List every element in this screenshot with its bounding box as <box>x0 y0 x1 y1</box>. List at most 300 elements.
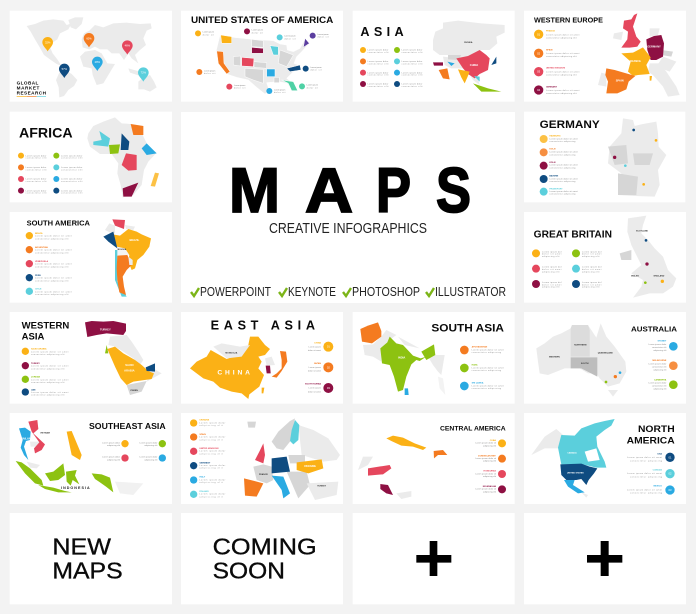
legend: 01 <box>669 455 672 459</box>
legend bubbles: Lorem ipsum <box>203 31 214 34</box>
panel: germany <box>524 112 685 202</box>
legend: Lorem ipsum dolor sit amet <box>31 378 69 381</box>
legend bubbles: dolor sit <box>274 91 286 94</box>
legend: UNITED KINGDOM <box>546 68 565 70</box>
heading: maps <box>229 156 471 226</box>
map: east asia <box>190 337 287 399</box>
legend <box>648 341 678 390</box>
legend: consectetur adipiscing elit <box>31 381 65 384</box>
legend: UKRAINE <box>199 419 210 422</box>
legend bubbles: Lorem ipsum <box>307 84 318 87</box>
legend: UNITED KINGDOM <box>199 448 219 450</box>
legend: SRI LANKA <box>472 381 484 384</box>
map: south america: BOLIVIA <box>118 248 127 251</box>
heading: coming soon: SOON <box>213 557 285 583</box>
legend: 01 <box>327 345 330 349</box>
legend: Lorem ipsum <box>309 345 321 348</box>
legend bubbles: Lorem ipsum <box>204 69 216 72</box>
map: world <box>27 17 157 97</box>
legend bubbles: Lorem ipsum <box>317 33 329 36</box>
map: asia: RUSSIA <box>464 41 473 44</box>
legend: Lorem ipsum dolor sit <box>475 488 496 491</box>
legend: Lorem ipsum dolor <box>199 450 226 453</box>
legend <box>18 153 83 195</box>
legend: CANBERRA <box>654 378 667 381</box>
legend: Lorem ipsum dolor sit amet <box>549 190 578 193</box>
legend: adipiscing elit <box>653 368 667 371</box>
legend: Lorem ipsum dolor sit amet <box>35 249 72 252</box>
legend: consectetur adipiscing elit <box>546 36 577 39</box>
legend: TURKEY <box>31 363 40 365</box>
legend bubbles <box>195 28 329 94</box>
map: south america: BRAZIL <box>129 238 140 242</box>
panel: africa <box>10 112 172 202</box>
legend: Lorem ipsum dolor sit <box>475 472 496 475</box>
map: germany <box>608 118 666 197</box>
legend: consectetur elit <box>652 384 667 387</box>
legend: Lorem ipsum dolor sit amet <box>35 235 72 238</box>
heading: new maps <box>52 533 123 583</box>
legend: consectetur adipiscing <box>472 387 502 390</box>
title: global market research: RESEARCH <box>17 91 47 96</box>
map: western europe: SPAIN <box>616 78 624 82</box>
legend: consectetur adipiscing <box>630 492 663 495</box>
legend: Lorem ipsum dolor sit amet <box>627 456 662 459</box>
map: south asia: INDIA <box>398 356 405 360</box>
map pins: 28% <box>95 60 101 64</box>
heading: maps: M <box>229 156 280 226</box>
legend: consectetur adipiscing <box>630 475 663 478</box>
legend bubbles: dolor sit <box>307 86 318 89</box>
map: southeast asia: INDONESIA <box>61 486 90 490</box>
map: south america <box>103 219 151 297</box>
legend: adipiscing elit <box>199 452 223 455</box>
legend: adipiscing elit <box>199 424 223 427</box>
software list with checkmarks: KEYNOTE <box>288 284 336 299</box>
legend: Lorem ipsum dolor sit <box>475 442 496 445</box>
legend: consectetur adipiscing elit <box>546 73 577 76</box>
legend: SAUDI ARABIA <box>31 348 47 351</box>
legend: FRANCE <box>546 30 556 33</box>
legend: Lorem ipsum dolor <box>102 441 120 444</box>
legend: consectetur elit <box>652 365 667 368</box>
map: australia: WESTERN <box>549 357 560 359</box>
legend: adipiscing elit <box>542 270 560 273</box>
legend: Lorem ipsum dolor sit amet <box>549 177 578 180</box>
legend bubbles: dolor sit <box>317 36 329 39</box>
legend: Lorem ipsum dolor sit amet <box>546 89 580 92</box>
panel: central america <box>353 413 515 504</box>
legend: HAMBURG <box>549 135 561 138</box>
legend: ITALY <box>199 476 206 479</box>
title: CENTRAL AMERICA <box>440 426 506 433</box>
legend: consectetur elit <box>402 51 423 54</box>
legend: Lorem ipsum dolor <box>26 154 47 157</box>
legend: Lorem ipsum dolor <box>199 493 226 496</box>
legend: Lorem ipsum dolor sit amet <box>627 472 662 475</box>
legend: adipiscing elit <box>199 481 223 484</box>
legend <box>627 453 675 495</box>
legend: adipiscing elit <box>107 458 120 461</box>
map: europe: UKRAINE <box>304 464 316 468</box>
title: GREAT BRITAIN <box>534 230 612 241</box>
legend: Lorem ipsum dolor <box>199 421 226 424</box>
panel: southeast asia <box>10 413 172 504</box>
title <box>22 320 70 342</box>
map: north america <box>531 419 615 498</box>
legend: MEXICO <box>653 486 662 488</box>
legend: Lorem ipsum dolor <box>402 49 423 52</box>
heading: new maps: MAPS <box>52 557 123 583</box>
map: western europe: FRANCE <box>630 59 641 63</box>
subtitle: CREATIVE INFOGRAPHICS <box>269 220 427 237</box>
legend: DOMINICAN REP. <box>478 454 496 457</box>
panel: asia <box>353 11 515 102</box>
legend: UAE <box>31 388 36 391</box>
legend: Lorem ipsum dolor sit amet <box>35 263 72 266</box>
legend: consectetur elit <box>61 180 83 183</box>
legend: Lorem ipsum dol <box>582 281 602 284</box>
panel: plus one <box>353 513 515 604</box>
title: AFRICA <box>19 125 73 141</box>
legend: BAYERN <box>549 175 559 178</box>
legend <box>360 47 423 88</box>
icon: plus <box>587 541 622 576</box>
software list with checkmarks: PHOTOSHOP <box>352 284 420 299</box>
legend: adipiscing elit <box>542 255 560 258</box>
panel: europe <box>181 413 343 504</box>
legend bubbles: Lorem ipsum <box>234 84 246 87</box>
legend: consectetur elit <box>61 157 83 160</box>
legend <box>305 341 333 393</box>
panel: east asia <box>181 312 343 404</box>
legend: dolor sit amet <box>308 370 321 373</box>
panel: south america <box>10 212 172 303</box>
legend: dolor sit amet <box>582 268 602 271</box>
legend bubbles: Lorem ipsum <box>252 29 263 32</box>
legend: SPAIN <box>546 48 553 51</box>
legend: Lorem ipsum dolor <box>61 166 83 169</box>
panel: western asia <box>10 312 172 404</box>
map: north america: CANADA <box>567 451 577 454</box>
map: great britain: ENGLAND <box>654 274 665 277</box>
legend: PERU <box>35 275 41 277</box>
legend: 02 <box>537 51 541 55</box>
legend: Lorem ipsum dol <box>542 266 562 269</box>
legend: VENEZUELA <box>35 260 49 263</box>
legend: consectetur adipiscing <box>472 369 502 372</box>
legend: consectetur adipiscing elit <box>546 55 577 58</box>
legend: Lorem ipsum dolor <box>26 189 47 192</box>
legend: 02 <box>669 472 672 476</box>
legend: consectetur adipiscing <box>549 193 576 196</box>
legend: Lorem ipsum dolor <box>199 478 226 481</box>
panel: plus two <box>524 513 686 604</box>
map: great britain <box>620 216 676 298</box>
legend: dolor sit amet <box>582 283 602 286</box>
title: AUSTRALIA <box>631 327 677 334</box>
legend bubbles: dolor sit <box>284 37 296 40</box>
legend: consectetur elit <box>368 85 389 88</box>
map: europe: FRANCE <box>259 473 268 476</box>
legend: adipiscing elit <box>144 458 158 461</box>
legend: AFGHANISTAN <box>472 345 488 348</box>
title: WESTERN <box>22 320 70 330</box>
legend: KÖLN <box>549 161 556 164</box>
legend bubbles: Lorem ipsum <box>274 88 286 91</box>
legend: 03 <box>537 70 541 74</box>
map: western asia: ARABIA <box>124 369 135 373</box>
legend: Lorem ipsum dolor <box>139 456 158 459</box>
map: southeast asia: THAILAND <box>19 436 33 440</box>
map pins: 32% <box>45 40 51 44</box>
legend: Lorem ipsum dolor sit amet <box>31 350 69 353</box>
heading: coming soon <box>213 533 317 583</box>
panel: new maps <box>10 513 172 604</box>
legend: CHINA <box>314 341 321 344</box>
legend: consectetur elit <box>26 192 47 195</box>
legend: dolor sit amet <box>308 390 321 393</box>
legend: Lorem ipsum dolor sit amet <box>549 164 578 167</box>
legend: Lorem ipsum dolor <box>368 71 389 74</box>
title: ASIA <box>22 332 45 342</box>
legend <box>190 419 226 498</box>
legend: Lorem ipsum dolor sit amet <box>546 52 580 55</box>
map: great britain: WALES <box>631 274 639 277</box>
legend: consectetur adipiscing elit <box>35 251 69 254</box>
legend: adipiscing elit <box>199 495 223 498</box>
legend: Lorem ipsum <box>309 387 321 390</box>
legend bubbles: Lorem ipsum <box>284 35 296 38</box>
legend: consectetur elit <box>26 157 47 160</box>
title: SOUTH ASIA <box>431 322 504 334</box>
legend bubbles: dolor sit <box>252 31 263 34</box>
legend: SOUTH KOREA <box>305 383 321 386</box>
panel: united states <box>181 11 343 102</box>
legend: consectetur adipiscing <box>549 140 576 143</box>
panel: coming soon <box>181 513 343 604</box>
heading: maps: A <box>305 156 353 226</box>
title: ASIA <box>360 25 404 39</box>
legend: consectetur adipiscing <box>549 180 576 183</box>
panel: south asia <box>353 312 515 404</box>
legend: consectetur adipiscing <box>549 167 576 170</box>
legend: consectetur adipiscing elit <box>31 367 65 370</box>
legend: consectetur adipiscing <box>630 459 663 462</box>
legend: INDIA <box>472 363 478 366</box>
legend: dolor sit amet <box>582 253 602 256</box>
software list with checkmarks: POWERPOINT <box>200 284 271 299</box>
title: global market research <box>17 81 47 97</box>
legend: adipiscing elit <box>483 475 496 478</box>
panel: australia <box>524 312 686 404</box>
legend: consectetur adipiscing elit <box>31 353 65 356</box>
legend: Lorem ipsum dolor <box>648 362 667 365</box>
legend: Lorem ipsum dolor sit amet <box>472 348 504 351</box>
legend: GERMANY <box>199 461 211 464</box>
map: europe: TURKEY <box>317 486 327 488</box>
map: usa <box>216 35 309 94</box>
map: south asia <box>360 322 445 395</box>
map pins: 60% <box>86 36 92 40</box>
map pins <box>42 33 149 82</box>
legend: adipiscing elit <box>653 349 667 352</box>
panel: north america <box>524 413 686 504</box>
title: SOUTH AMERICA <box>27 221 90 228</box>
legend: consectetur adipiscing elit <box>35 293 69 296</box>
legend: Lorem ipsum dolor sit amet <box>35 290 72 293</box>
map: australia: NORTHERN <box>574 345 587 347</box>
legend: consectetur elit <box>652 346 667 349</box>
software list with checkmarks: ILLUSTRATOR <box>435 284 506 299</box>
legend: 03 <box>327 386 330 390</box>
map: australia <box>536 323 626 397</box>
legend: dolor sit amet <box>542 283 562 286</box>
legend: FINLAND <box>199 490 209 493</box>
legend bubbles: Lorem ipsum <box>310 66 322 69</box>
legend: Lorem ipsum dolor <box>368 83 389 86</box>
legend: Lorem ipsum dolor sit amet <box>31 391 69 394</box>
legend: Lorem ipsum dolor sit amet <box>35 277 72 280</box>
legend: 03 <box>669 488 672 492</box>
map: western asia: SAUDI <box>125 363 134 367</box>
legend <box>475 439 506 493</box>
map: australia: SOUTH <box>581 363 589 365</box>
legend: SYDNEY <box>657 341 667 343</box>
map: asia <box>433 21 505 92</box>
map: southeast asia: VIETNAM <box>40 432 50 435</box>
legend: consectetur adipiscing elit <box>35 237 69 240</box>
legend: Lorem ipsum dol <box>542 250 562 253</box>
legend: BRAZIL <box>35 232 44 235</box>
legend: NICARAGUA <box>483 485 496 488</box>
legend: Lorem ipsum dolor sit amet <box>472 366 504 369</box>
legend: adipiscing elit <box>582 286 600 289</box>
heading: maps: S <box>436 156 471 226</box>
title: global market research: GLOBAL <box>17 81 38 86</box>
legend: Lorem ipsum dolor <box>61 178 83 181</box>
legend: Lorem ipsum <box>309 366 321 369</box>
heading: maps: P <box>376 156 411 226</box>
legend <box>532 249 602 289</box>
legend: FRANKFURT <box>549 187 563 190</box>
legend: adipiscing elit <box>653 387 667 390</box>
legend: KÖLN <box>549 148 556 151</box>
panel: great britain <box>524 212 686 303</box>
map: western asia <box>85 321 162 395</box>
legend <box>460 345 504 390</box>
legend <box>534 30 580 95</box>
legend: Lorem ipsum dolor <box>26 178 47 181</box>
legend: CHILE <box>35 289 42 291</box>
legend <box>102 440 166 462</box>
legend: Lorem ipsum dolor <box>199 464 226 467</box>
legend: consectetur elit <box>368 62 389 65</box>
legend: Lorem ipsum dolor <box>648 381 667 384</box>
map: southeast asia <box>16 420 143 495</box>
legend: Lorem ipsum dolor sit amet <box>549 150 578 153</box>
legend: Lorem ipsum dolor <box>402 60 423 63</box>
title: NORTH <box>638 424 675 434</box>
legend: adipiscing elit <box>542 286 560 289</box>
legend: Lorem ipsum dolor sit amet <box>472 384 504 387</box>
legend: Lorem ipsum dolor <box>61 154 83 157</box>
map: great britain: SCOTLAND <box>636 229 648 232</box>
legend: adipiscing elit <box>483 444 496 447</box>
legend: consectetur adipiscing elit <box>546 92 577 95</box>
title: GERMANY <box>540 119 600 131</box>
title: SOUTHEAST ASIA <box>89 422 166 431</box>
map: western asia: YEMEN <box>130 390 138 392</box>
panel: centre cover <box>181 112 515 303</box>
title: AMERICA <box>627 436 675 446</box>
legend: Lorem ipsum dolor <box>26 166 47 169</box>
legend bubbles: dolor sit <box>310 69 322 72</box>
legend: Lorem ipsum dol <box>582 266 602 269</box>
legend: Lorem ipsum dolor sit amet <box>546 33 580 36</box>
legend: ARGENTINA <box>35 246 48 249</box>
legend bubbles: dolor sit <box>204 72 216 75</box>
legend: consectetur elit <box>402 85 423 88</box>
legend: Lorem ipsum dolor sit amet <box>546 70 580 73</box>
icon: plus <box>416 541 451 576</box>
legend: adipiscing elit <box>199 438 223 441</box>
legend: consectetur adipiscing elit <box>35 265 69 268</box>
legend: adipiscing elit <box>582 270 600 273</box>
legend: CANADA <box>653 469 662 472</box>
legend: consectetur elit <box>368 74 389 77</box>
map pins: 57% <box>62 67 68 71</box>
legend: CUBA <box>490 439 496 442</box>
legend: HONDURAS <box>484 470 497 473</box>
legend: adipiscing elit <box>483 490 496 493</box>
legend: Lorem ipsum dolor sit <box>475 457 496 460</box>
map: western europe <box>598 13 680 97</box>
title: WESTERN EUROPE <box>534 18 603 25</box>
legend: Lorem ipsum dolor <box>102 456 120 459</box>
map: central america <box>358 436 447 499</box>
map pins: 72% <box>141 71 147 75</box>
legend: Lorem ipsum dolor sit amet <box>31 365 69 368</box>
legend: Lorem ipsum dol <box>542 281 562 284</box>
legend: Lorem ipsum dolor <box>368 49 389 52</box>
legend: 01 <box>537 32 541 36</box>
map: australia: QUEENSLAND <box>598 352 613 355</box>
legend: consectetur adipiscing elit <box>31 394 65 397</box>
panel: world map <box>10 11 172 102</box>
map: western europe: GERMANY <box>647 45 661 49</box>
legend: adipiscing elit <box>582 255 600 258</box>
title: UNITED STATES OF AMERICA <box>191 15 334 25</box>
legend: consectetur adipiscing <box>472 351 502 354</box>
map: western asia: TURKEY <box>100 328 111 332</box>
legend: Lorem ipsum dol <box>582 250 602 253</box>
legend: 04 <box>537 88 541 92</box>
title <box>627 424 675 446</box>
legend: adipiscing elit <box>144 444 158 447</box>
legend: Lorem ipsum dolor <box>139 441 158 444</box>
map: north america: UNITED STATES <box>567 472 584 475</box>
legend: consectetur elit <box>61 192 83 195</box>
legend: consectetur adipiscing <box>549 153 576 156</box>
legend: Lorem ipsum dolor <box>402 83 423 86</box>
legend: SPAIN <box>199 433 206 436</box>
heading: coming soon: COMING <box>213 533 317 559</box>
legend: consectetur elit <box>402 74 423 77</box>
legend: Lorem ipsum dolor <box>368 60 389 63</box>
legend: Lorem ipsum dolor <box>61 189 83 192</box>
legend: dolor sit amet <box>542 268 562 271</box>
